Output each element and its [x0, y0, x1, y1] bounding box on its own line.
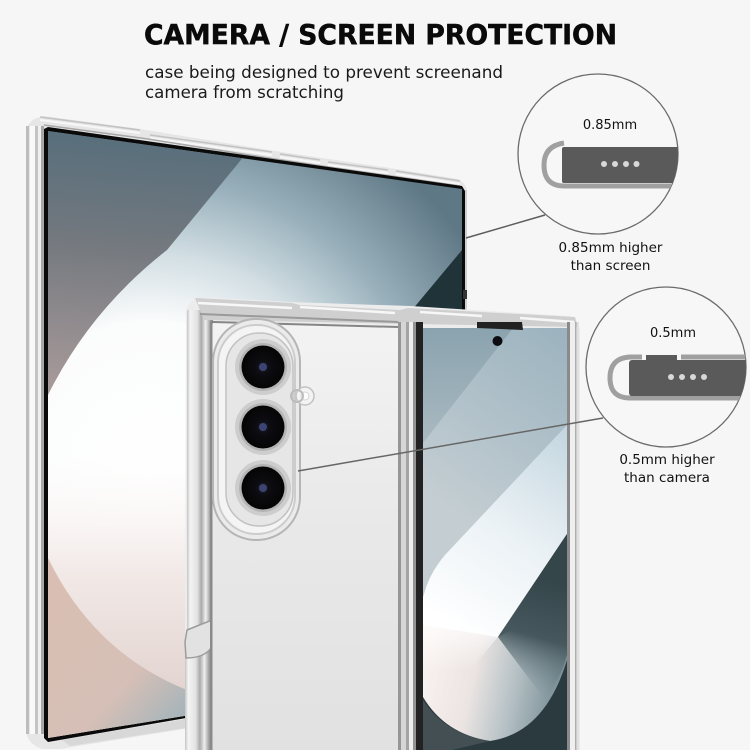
title: CAMERA / SCREEN PROTECTION	[144, 18, 617, 51]
measurement label: 0.85mm	[583, 118, 637, 133]
measurement label: 0.5mm	[650, 326, 696, 341]
clear case frame	[26, 116, 467, 749]
black bezel	[44, 127, 465, 742]
punch-hole camera	[492, 336, 502, 346]
caption: 0.5mm higher than camera: than camera	[624, 470, 710, 486]
magnifier circle	[518, 74, 678, 234]
caption: 0.85mm higher than screen: 0.85mm higher	[559, 240, 663, 256]
hinge	[398, 322, 401, 750]
hinge bump	[185, 620, 212, 658]
screen right rail	[567, 322, 570, 750]
subtitle text block	[145, 63, 503, 102]
camera island	[213, 319, 314, 540]
lens 2	[235, 399, 291, 455]
top rail	[195, 298, 578, 327]
magnifier circle	[586, 287, 746, 447]
case cross-section	[544, 143, 687, 186]
back phone: inner screen in clear case	[26, 116, 468, 749]
caption: 0.85mm higher than screen	[559, 240, 663, 274]
wallpaper	[48, 125, 468, 745]
front phone: clear case with back and screen	[185, 297, 580, 750]
back panel	[212, 322, 398, 750]
subtitle text block: case being designed to prevent screenand	[145, 63, 503, 82]
callout: screen lip 0.85mm	[518, 74, 687, 234]
flash	[291, 387, 314, 405]
selfie camera notch	[477, 322, 523, 330]
callout: camera lip 0.5mm	[586, 287, 750, 447]
left rail	[187, 310, 213, 630]
subtitle text block: camera from scratching	[145, 83, 344, 102]
island bump	[213, 319, 300, 540]
front screen	[423, 328, 567, 750]
caption: 0.5mm higher than camera: 0.5mm higher	[619, 452, 715, 468]
caption: 0.5mm higher than camera	[619, 452, 715, 486]
leader line: screen callout	[466, 215, 545, 238]
side button details	[463, 290, 467, 299]
leader line: camera callout	[298, 418, 603, 471]
caption: 0.85mm higher than screen: than screen	[571, 258, 650, 274]
lens 3	[235, 460, 291, 516]
lens 1	[235, 339, 291, 395]
case outer shell	[185, 297, 580, 750]
case cross-section	[610, 355, 750, 398]
